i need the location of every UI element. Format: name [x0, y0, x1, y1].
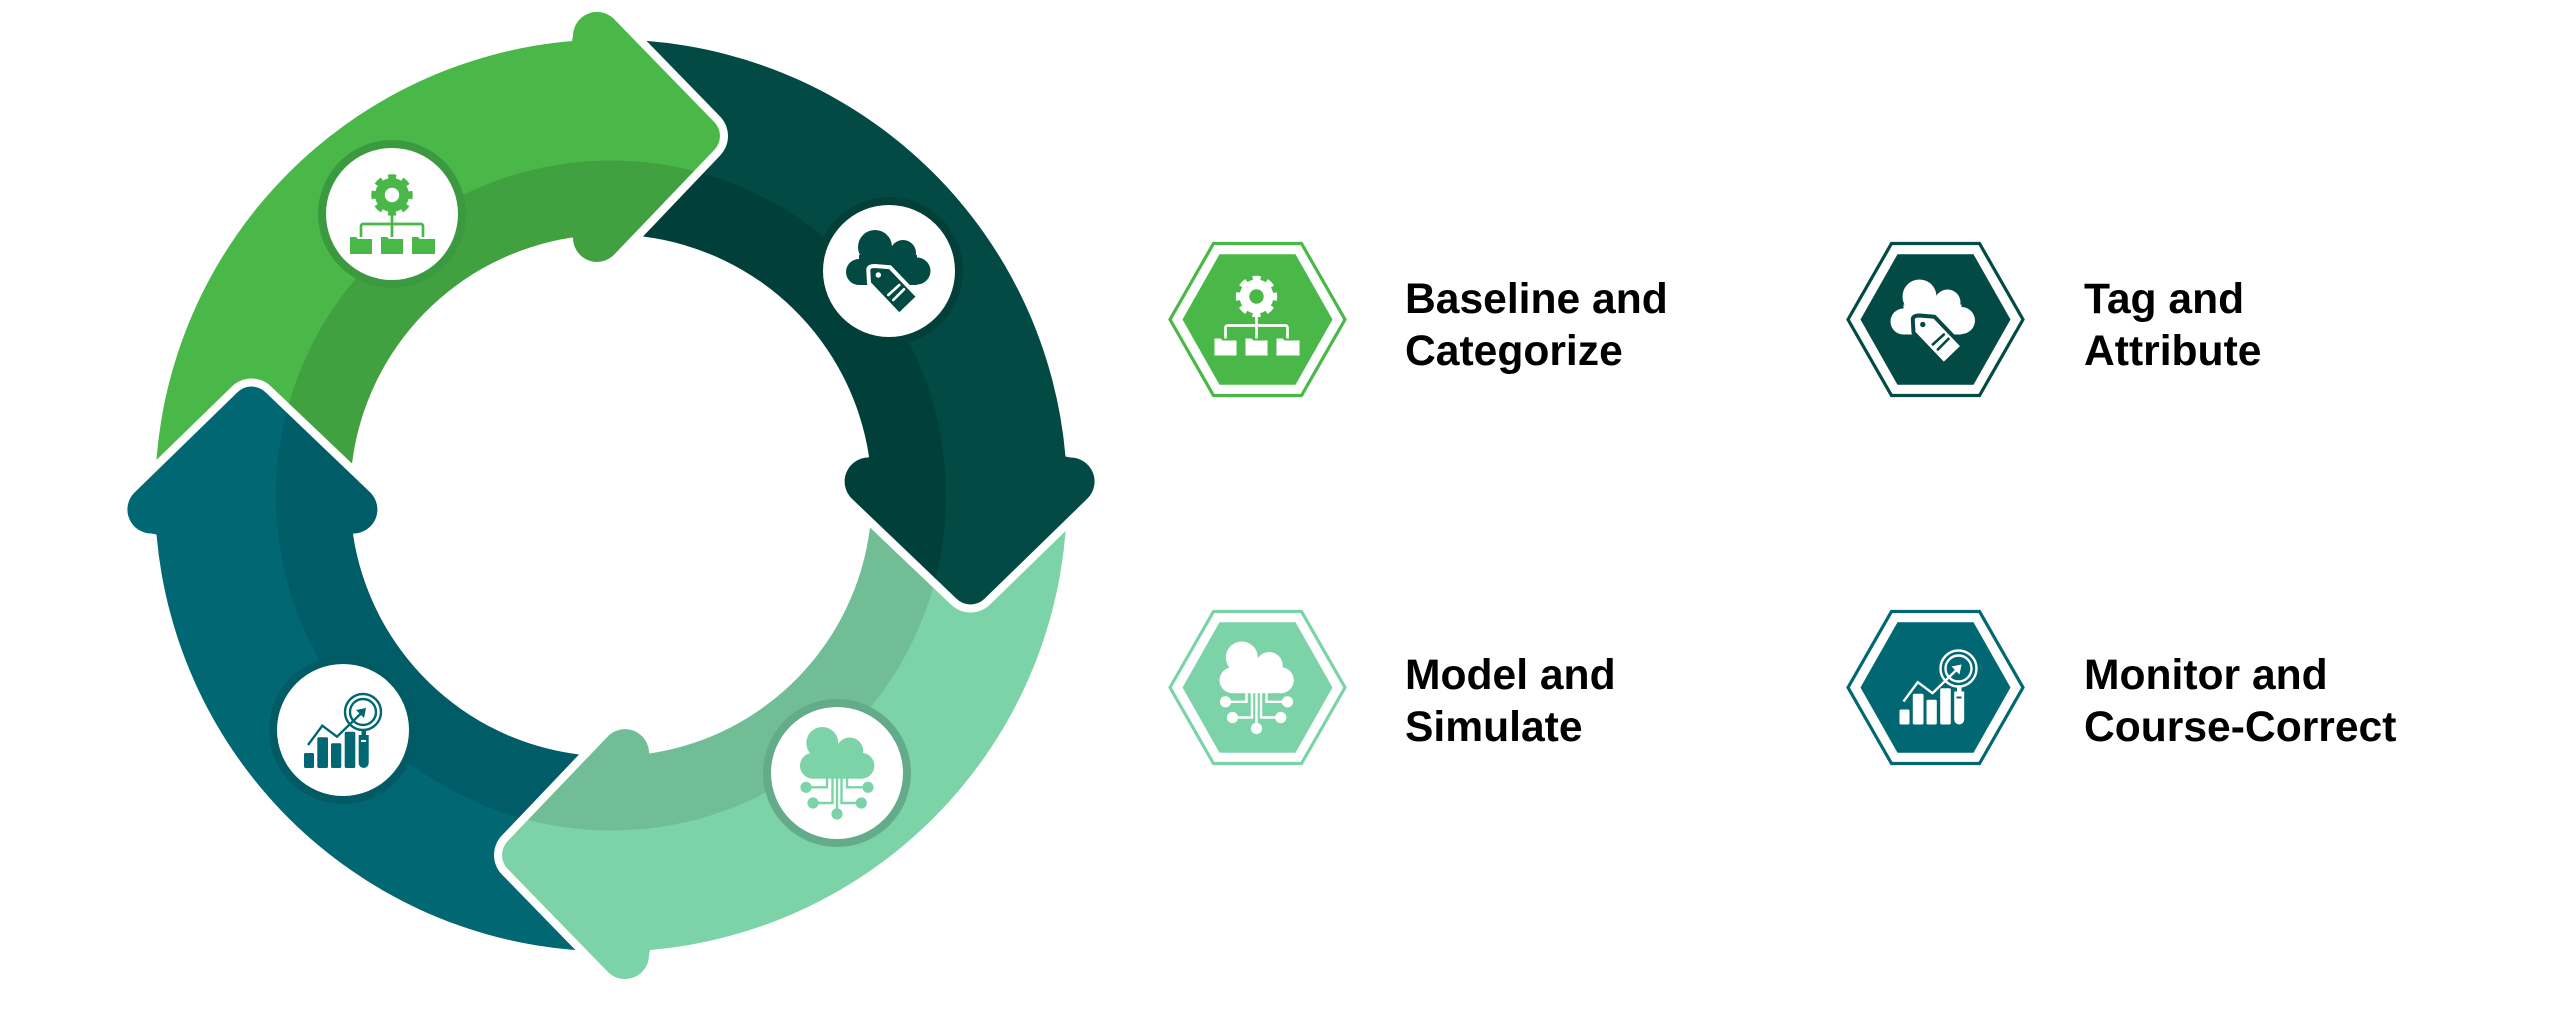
legend item: baseline and categorize: [1170, 244, 1668, 396]
label: Model and: [1405, 651, 1616, 699]
icon badge: cloud and tag: [815, 197, 963, 345]
arrow: tag and attribute: [643, 40, 1095, 604]
label: Baseline and: [1405, 275, 1668, 323]
arrow: model and simulate: [502, 528, 1066, 980]
label: Tag and: [2084, 275, 2244, 323]
label: Course-Correct: [2084, 703, 2396, 751]
hexagon icon: chart and magnifier: [1848, 612, 2023, 764]
hexagon icon: cloud and tag: [1848, 244, 2023, 396]
legend item: monitor and course-correct: [1848, 612, 2396, 764]
icon badge: gear and folders: [318, 140, 466, 288]
label: Categorize: [1405, 327, 1623, 375]
hexagon icon: gear and folders: [1170, 244, 1345, 396]
hexagon icon: cloud circuit: [1170, 612, 1345, 764]
icon badge: cloud circuit: [763, 699, 911, 847]
legend item: model and simulate: [1170, 612, 1616, 764]
arrow: baseline and categorize: [156, 12, 720, 464]
cycle diagram: [127, 12, 1095, 979]
arrow: monitor and course-correct: [127, 386, 579, 950]
label: Monitor and: [2084, 651, 2328, 699]
label: Simulate: [1405, 703, 1583, 751]
icon badge: chart and magnifier: [269, 656, 417, 804]
label: Attribute: [2084, 327, 2261, 375]
legend item: tag and attribute: [1848, 244, 2261, 396]
